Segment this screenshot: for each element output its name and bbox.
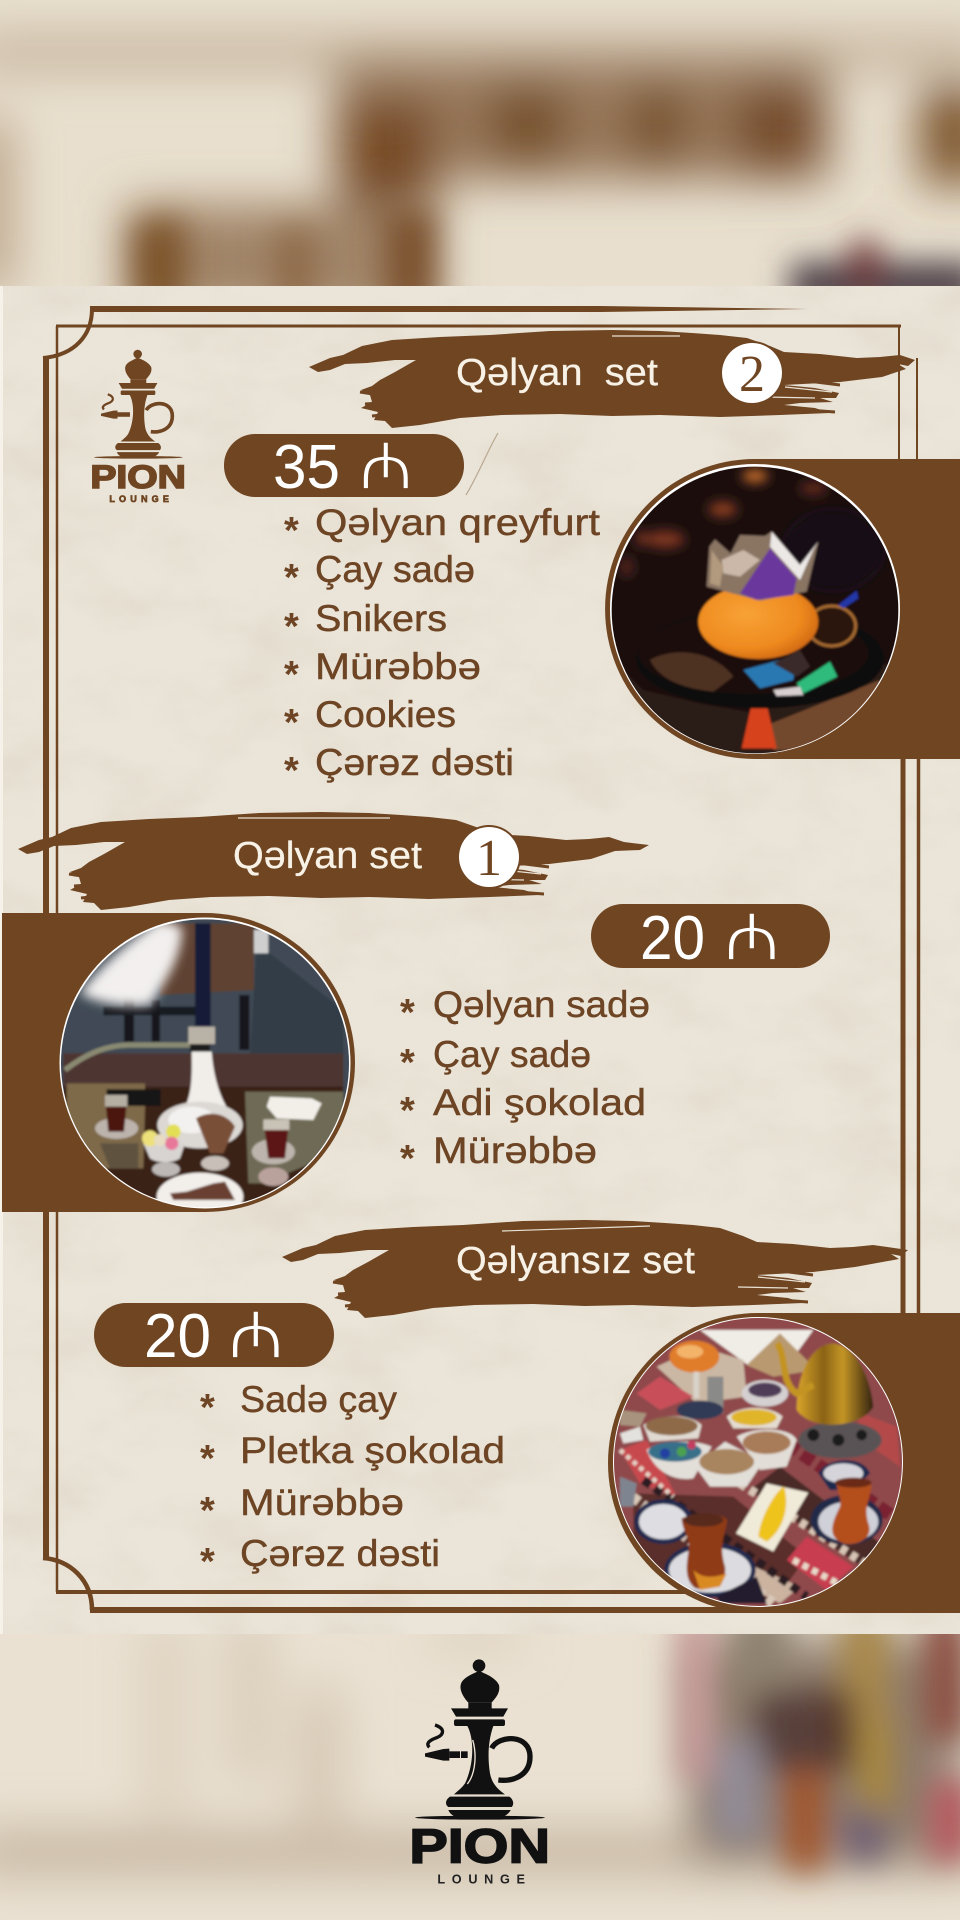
logo: small brown PION Lounge: LOUNGE [109,494,169,504]
list: set 2 items: * [284,654,299,696]
manat sign: ₼ [228,1297,284,1374]
list: set 1 items: * [400,992,415,1034]
logo: small brown PION Lounge: PION [90,458,186,495]
list: set 3 items: Pletka şokolad [240,1430,505,1471]
list: set 2 items: * [284,702,299,744]
list: set 3 items: Sadə çay [240,1379,397,1420]
price pill: 20 manat set 3: 20 [144,1302,211,1371]
panel: brown block set 3 with photo [600,1310,960,1630]
list: set 1 items: * [400,1042,415,1084]
blurred top background [0,0,960,286]
price pill: 20 manat set 3 [94,1297,334,1374]
list: set 2 items: * [284,510,299,552]
manat sign: ₼ [359,428,413,505]
list: set 1 items: Qəlyan sadə [433,984,650,1025]
list: set 1 items: Çay sadə [433,1034,591,1075]
list: set 3 items: * [200,1438,215,1480]
logo: large black PION Lounge: LOUNGE [437,1872,525,1886]
list: set 2 items: Çay sadə [315,549,475,590]
list: set 1 items: * [400,1138,415,1180]
list: set 1 items: * [400,1090,415,1132]
heading text: Qəlyan set [233,835,422,877]
list: set 2 items: Mürəbbə [315,646,481,687]
number badge 1 [457,825,521,889]
heading brush: Qəlyan set 2 [309,330,915,428]
list: set 2 items: * [284,750,299,792]
logo: small brown PION Lounge [90,350,186,504]
price pill: 35 manat [224,428,464,505]
price pill: 20 manat set 1: 20 [640,904,705,973]
price pill: 35 manat: 35 [273,433,340,502]
list: set 1 items: Mürəbbə [433,1130,597,1171]
chess piece hookah [415,1659,545,1820]
heading brush: Qəlyan set 1 [18,812,649,910]
list: set 3 items: * [200,1387,215,1429]
list: set 3 items: Çərəz dəsti [240,1533,440,1574]
list: set 1 items [400,984,650,1180]
number badge 2 [720,341,784,405]
list: set 3 items [200,1379,505,1583]
list: set 3 items: * [200,1541,215,1583]
list: set 2 items: * [284,557,299,599]
list: set 3 items: * [200,1490,215,1532]
heading brush: Qəlyansız set [282,1220,908,1318]
list: set 2 items: Qəlyan qreyfurt [315,502,601,543]
list: set 2 items: Cookies [315,694,456,735]
photo: hookah on table with tea [61,919,349,1208]
panel: paper background [0,286,960,1634]
list: set 2 items: Çərəz dəsti [315,742,514,783]
heading text: Qəlyansız set [456,1240,695,1282]
number badge 2: 2 [739,346,765,403]
list: set 2 items [284,502,601,792]
logo: large black PION Lounge [409,1659,550,1886]
panel: brown block set 1 with photo [2,913,355,1212]
manat sign: ₼ [724,899,780,976]
panel: brown block set 2 with photo [600,450,960,770]
logo: large black PION Lounge: PION [409,1820,550,1874]
list: set 2 items: Snikers [315,598,447,639]
list: set 2 items: * [284,606,299,648]
price pill: 20 manat set 1 [591,899,830,976]
photo: grapefruit hookah bowl [612,466,898,754]
heading text: Qəlyan set [456,352,658,394]
number badge 1: 1 [476,830,502,887]
blurred bottom background [0,1634,960,1912]
list: set 1 items: Adi şokolad [433,1082,646,1123]
photo: tea table with snacks [614,1318,902,1606]
list: set 3 items: Mürəbbə [240,1482,404,1523]
decorative frame [43,306,918,1610]
